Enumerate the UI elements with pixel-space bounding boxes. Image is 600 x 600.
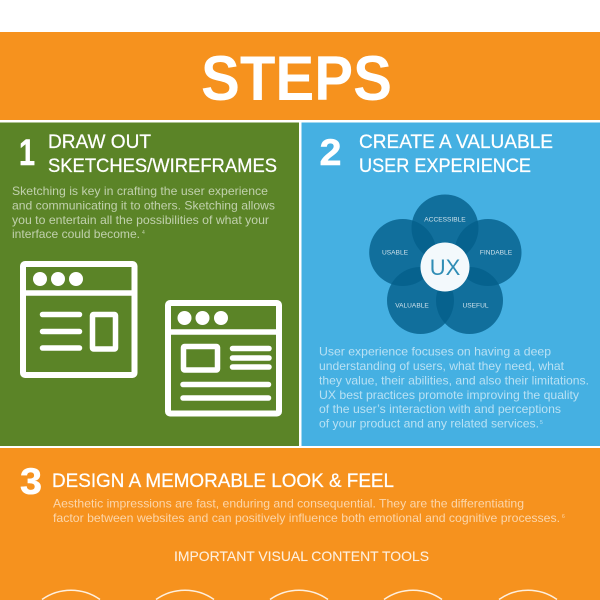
step number 3: 3 bbox=[20, 461, 42, 502]
heading: step 1: DRAW OUT bbox=[48, 132, 151, 153]
petal: useful bbox=[436, 267, 503, 334]
text block: step 1 description bbox=[12, 184, 275, 241]
text block: step 2 description: User experience focuses on having a deep bbox=[319, 345, 551, 359]
icons: tool circles bbox=[42, 590, 557, 600]
petal: valuable: VALUABLE bbox=[395, 302, 429, 310]
petal: accessible bbox=[412, 194, 478, 262]
text block: step 2 description: they value, their abilities, and also their limitations. bbox=[319, 374, 589, 388]
heading: step 1: SKETCHES/WIREFRAMES bbox=[48, 156, 277, 177]
text block: step 2 description: 5 bbox=[540, 420, 543, 426]
panel: step 3 look and feel bbox=[0, 448, 600, 600]
text block: step 1 description: you to entertain all the possibilities of what your bbox=[12, 213, 269, 227]
text block: step 2 description: UX best practices promote improving the quality bbox=[319, 388, 579, 402]
heading: step 2: USER EXPERIENCE bbox=[359, 156, 531, 177]
text block: step 3 description: 6 bbox=[562, 514, 565, 520]
center: UX bbox=[420, 242, 470, 292]
text block: step 1 description: and communicating it to others. Sketching allows bbox=[12, 198, 275, 212]
text block: step 3 description: Aesthetic impressions are fast, enduring and consequential. They are the differentiating bbox=[53, 496, 524, 510]
heading: step 1 bbox=[48, 132, 277, 177]
heading: step 2 bbox=[359, 132, 553, 177]
heading: step 2: CREATE A VALUABLE bbox=[359, 132, 553, 153]
text block: step 1 description: Sketching is key in crafting the user experience bbox=[12, 184, 268, 198]
petal: usable: USABLE bbox=[382, 250, 409, 256]
title banner bbox=[0, 32, 600, 120]
title: STEPS bbox=[201, 44, 392, 114]
petal: findable bbox=[454, 219, 522, 286]
petal: valuable bbox=[387, 267, 454, 334]
heading: step 3: DESIGN A MEMORABLE LOOK & FEEL bbox=[52, 471, 394, 492]
petal: usable bbox=[369, 219, 436, 286]
panel: step 1 sketches and wireframes bbox=[0, 122, 299, 446]
petal: findable: FINDABLE bbox=[480, 250, 513, 256]
icon: wireframe window two bbox=[168, 303, 279, 414]
text block: step 3 description: factor between websites and can positively influence both emotional and cognitive processes. bbox=[53, 511, 560, 525]
icon: wireframe window one bbox=[23, 264, 134, 375]
center: UX: UX bbox=[430, 255, 461, 280]
text block: step 3 description bbox=[53, 496, 565, 525]
text block: step 2 description: of your product and any related services. bbox=[319, 416, 539, 430]
text block: step 1 description: interface could become. bbox=[12, 227, 140, 241]
step number 2: 2 bbox=[320, 132, 342, 173]
text block: step 2 description: understanding of users, what they need, what bbox=[319, 359, 565, 373]
petal: useful: USEFUL bbox=[462, 302, 489, 310]
subheading: visual content tools: IMPORTANT VISUAL CONTENT TOOLS bbox=[174, 548, 429, 564]
text block: step 1 description: 4 bbox=[142, 230, 145, 236]
text block: step 2 description: of the user’s interaction with and perceptions bbox=[319, 402, 561, 416]
step number 1: 1 bbox=[19, 132, 35, 173]
text block: step 2 description bbox=[319, 345, 589, 430]
petal: accessible: ACCESSIBLE bbox=[424, 216, 466, 224]
chart: UX petal diagram bbox=[369, 194, 522, 334]
panel: step 2 user experience bbox=[302, 122, 600, 446]
